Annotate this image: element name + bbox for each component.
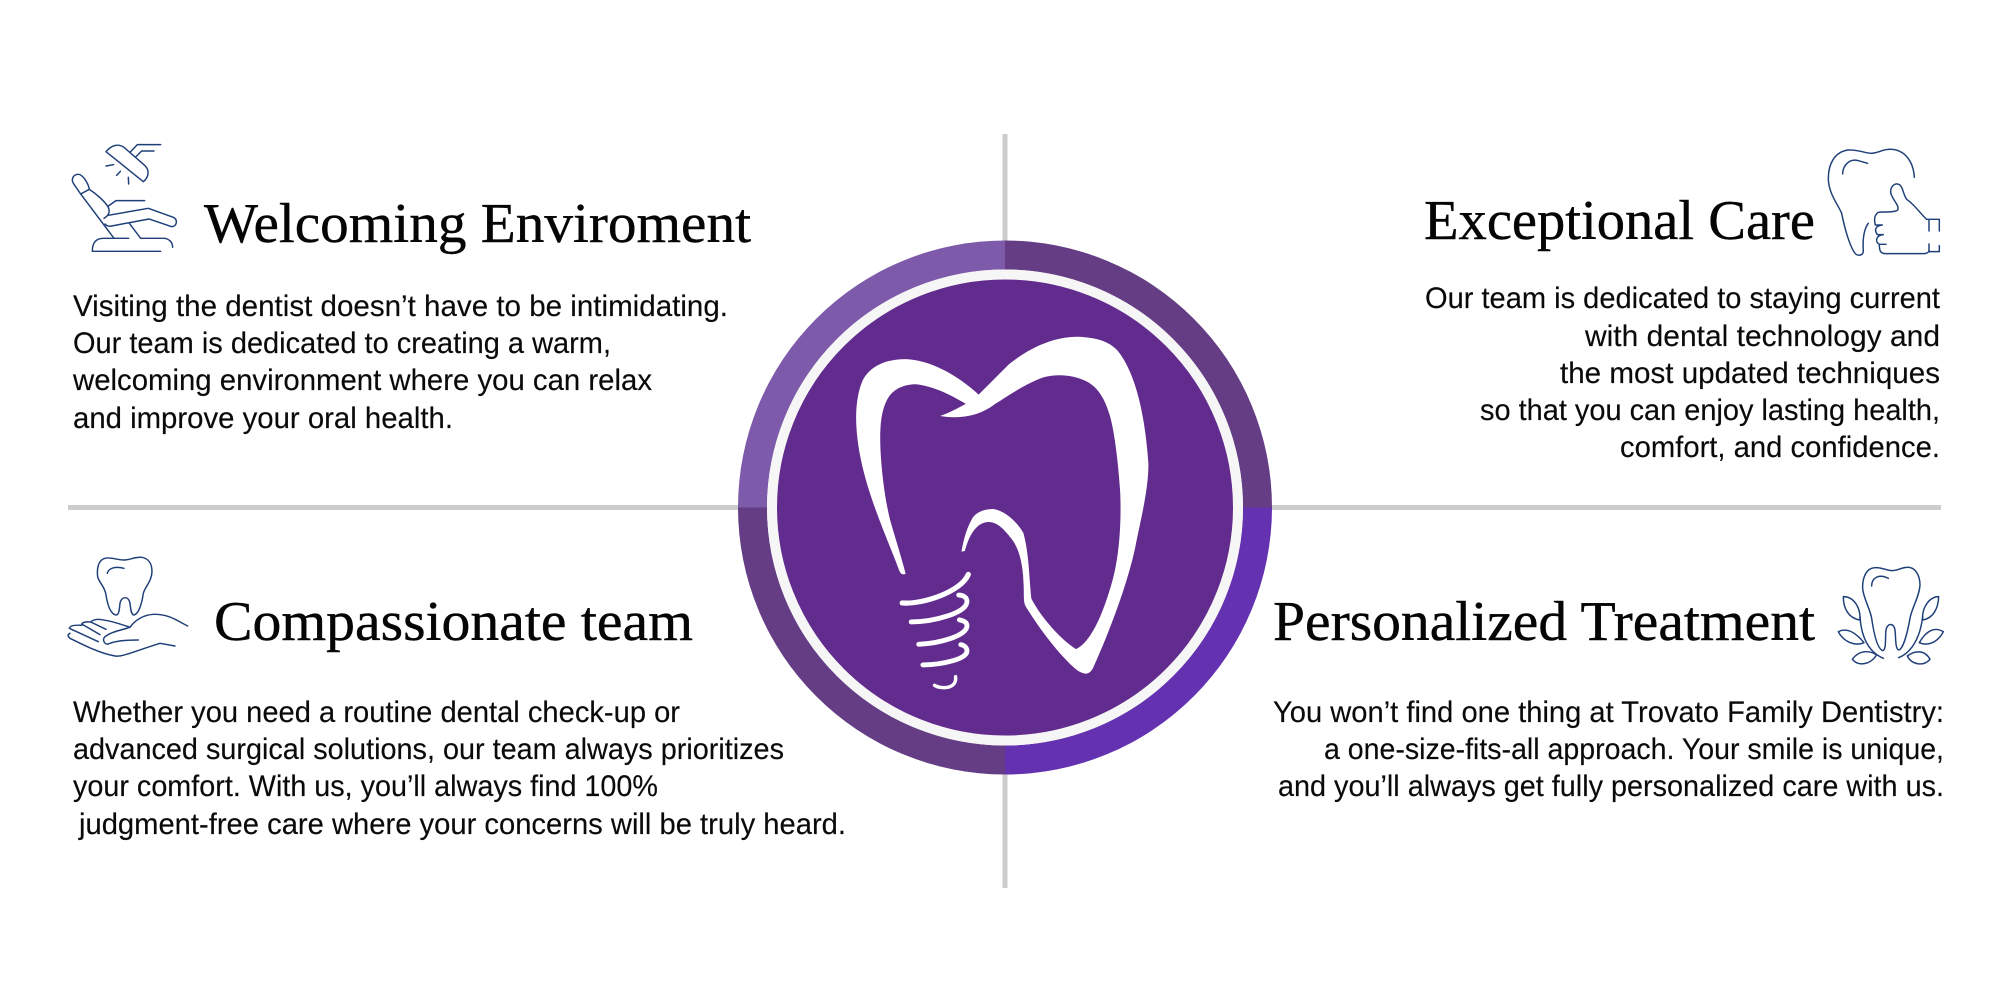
ring segment: bottom right	[1005, 508, 1272, 774]
panel: welcoming environment	[72, 145, 751, 435]
icon: dental chair	[72, 145, 176, 251]
body text: welcoming environment where you can relax	[72, 364, 652, 397]
icon: tooth above open hand	[68, 557, 188, 656]
body text: You won’t find one thing at Trovato Family Dentistry:	[1273, 696, 1944, 729]
body text: your comfort. With us, you’ll always find 100%	[73, 770, 658, 803]
body text	[1425, 282, 1941, 464]
body text: Whether you need a routine dental check-up or	[73, 696, 680, 729]
heading: Welcoming Enviroment	[204, 193, 751, 255]
body text: so that you can enjoy lasting health,	[1480, 394, 1940, 427]
panel: personalized treatment	[1273, 567, 1944, 803]
body text	[1273, 696, 1944, 803]
white ring and purple disc	[772, 274, 1238, 740]
heading: Compassionate team	[214, 591, 693, 653]
body text	[72, 290, 728, 435]
body text: Our team is dedicated to staying current	[1425, 282, 1941, 315]
body text: comfort, and confidence.	[1620, 431, 1940, 464]
body text: judgment-free care where your concerns will be truly heard.	[78, 808, 846, 841]
heading: Personalized Treatment	[1273, 591, 1815, 653]
heading: Exceptional Care	[1424, 190, 1815, 252]
body text: Our team is dedicated to creating a warm,	[73, 327, 611, 360]
body text: advanced surgical solutions, our team always prioritizes	[73, 733, 784, 766]
panel: exceptional care	[1424, 149, 1941, 464]
body text: a one-size-fits-all approach. Your smile is unique,	[1324, 733, 1944, 766]
body text: with dental technology and	[1584, 320, 1940, 353]
ring segment: bottom left	[738, 508, 1005, 775]
body text: and improve your oral health.	[73, 402, 453, 435]
body text: the most updated techniques	[1560, 357, 1940, 390]
panel: compassionate team	[68, 557, 846, 841]
icon: tooth with laurel leaves	[1838, 567, 1943, 664]
ring segment: top right	[1005, 240, 1272, 508]
body text: and you’ll always get fully personalized care with us.	[1278, 770, 1944, 803]
central tooth badge	[738, 240, 1272, 775]
body text	[73, 696, 846, 841]
ring segment: top left	[738, 240, 1005, 508]
body text: Visiting the dentist doesn’t have to be intimidating.	[73, 290, 728, 323]
icon: tooth implant logo	[856, 337, 1148, 688]
icon: tooth with thumbs up	[1828, 149, 1939, 255]
